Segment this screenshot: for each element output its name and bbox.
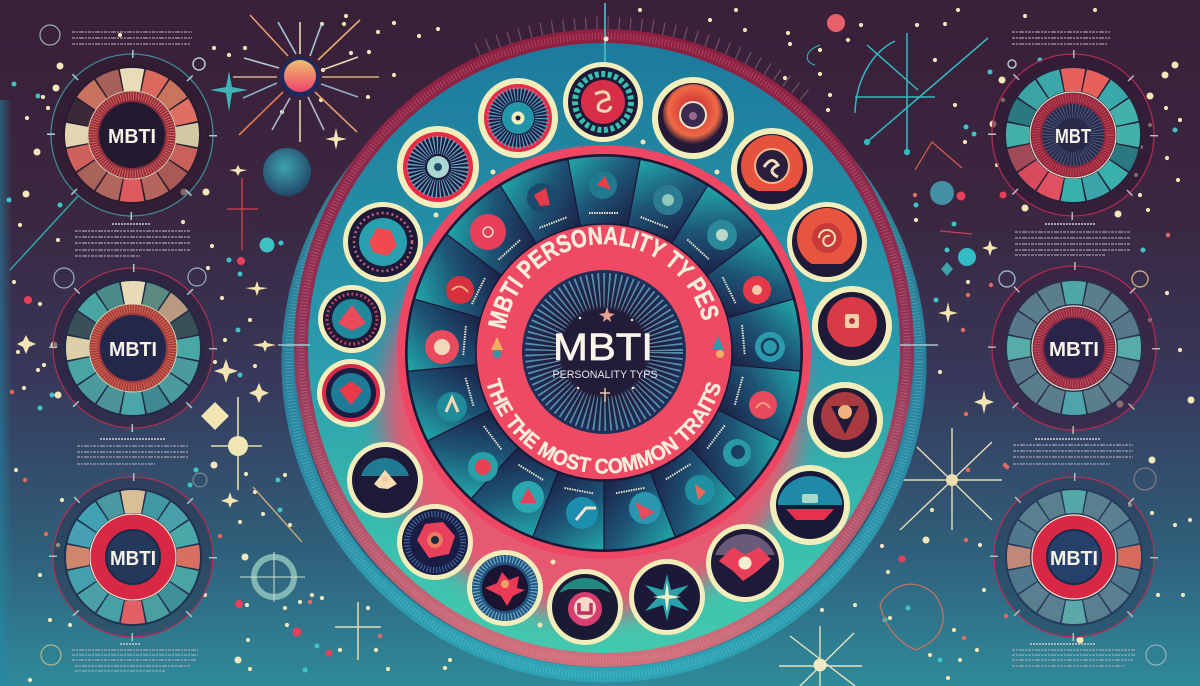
diagonal cream line (253, 487, 302, 542)
orbit 5 (318, 285, 386, 353)
center decor (578, 307, 633, 402)
orbit 11 (629, 559, 705, 635)
orbit 14 (807, 382, 883, 458)
orbit 12 (706, 524, 784, 602)
center disc (559, 307, 649, 397)
greeked text: right under wheel three (1012, 644, 1135, 666)
outer teal dotted ring (289, 49, 919, 675)
pink band (397, 145, 811, 559)
orbit 3 (397, 126, 479, 208)
pink glow (384, 200, 800, 616)
greeked text: left under wheel three (72, 644, 198, 671)
large star bottom right middle (900, 428, 1002, 530)
orbit 17 (731, 128, 813, 210)
greeked text: left top (72, 32, 192, 44)
wedges (405, 156, 803, 553)
greeked text: right top (1012, 32, 1110, 44)
wedge icons (425, 171, 785, 529)
center subtitle: PERSONALITY TYPS (552, 369, 658, 381)
greeked text: right under wheel one (1015, 224, 1130, 255)
orbit 1 (563, 62, 643, 142)
top needle (604, 3, 608, 62)
orbit 13 (770, 465, 850, 545)
teal diagonal line left (10, 196, 78, 270)
side wheel: top right: MBT (1055, 126, 1091, 148)
side wheel: bottom right: MBTI (1050, 548, 1098, 570)
sparkle stars (17, 71, 998, 508)
side wheel: bottom left: MBTI (110, 548, 156, 570)
center MBTI: MBTI (553, 327, 653, 369)
ring side icons (491, 336, 724, 358)
left edge strip (0, 100, 12, 686)
red dotted ring (301, 36, 907, 660)
side wheel: top right (992, 54, 1154, 216)
red triangle constellation (915, 142, 972, 234)
orbit 16 (787, 202, 867, 282)
greeked text: right under wheel two (1013, 439, 1133, 464)
dark center circle (522, 270, 686, 434)
side wheel: top left: MBTI (108, 126, 156, 148)
orbit 6 (317, 359, 385, 427)
orbit 18 (652, 77, 734, 159)
greeked text: left under wheel two (77, 439, 188, 464)
star bottom (779, 626, 862, 686)
side wheel: bottom right (994, 477, 1154, 637)
orbit 9 (467, 550, 543, 626)
orbit 8 (397, 504, 473, 580)
ring title top: MBTI PERSONALITY TY PES (488, 226, 719, 329)
tick marks top (470, 16, 809, 100)
red outline shape bottom right (880, 584, 943, 650)
center rays (543, 291, 665, 413)
side wheel: middle right (992, 266, 1156, 430)
pink title ring (476, 224, 732, 480)
side wheel: middle left (53, 268, 213, 428)
side wheel: middle left: MBTI (109, 339, 157, 361)
horizontal ring ticks (278, 344, 938, 346)
disk sparkle dots (436, 142, 717, 625)
teal constellation right (807, 33, 988, 154)
orbit circles (317, 62, 892, 645)
orbit 4 (343, 202, 423, 282)
main wheel (278, 3, 938, 682)
dark wheel backing (405, 154, 803, 552)
orbit 10 (547, 569, 623, 645)
teal ring ornament (240, 552, 305, 602)
teal and red balls (237, 14, 976, 266)
thin cross bottom left (335, 602, 381, 660)
teal inner disk (304, 39, 904, 657)
orbit 2 (478, 78, 558, 158)
large cream star left (211, 397, 262, 490)
sun with rays (233, 15, 379, 142)
red crosshair left (227, 178, 258, 250)
planet left (263, 148, 311, 196)
side wheel: top left (51, 54, 213, 216)
ring title bottom: THE THE MOST COMMON TRAITS (487, 378, 720, 474)
greeked text: left under wheel one (75, 224, 190, 256)
orbit 7 (347, 442, 423, 518)
orbit 15 (812, 286, 892, 366)
side wheel: bottom left (53, 477, 213, 637)
side wheel: middle right: MBTI (1049, 339, 1099, 361)
